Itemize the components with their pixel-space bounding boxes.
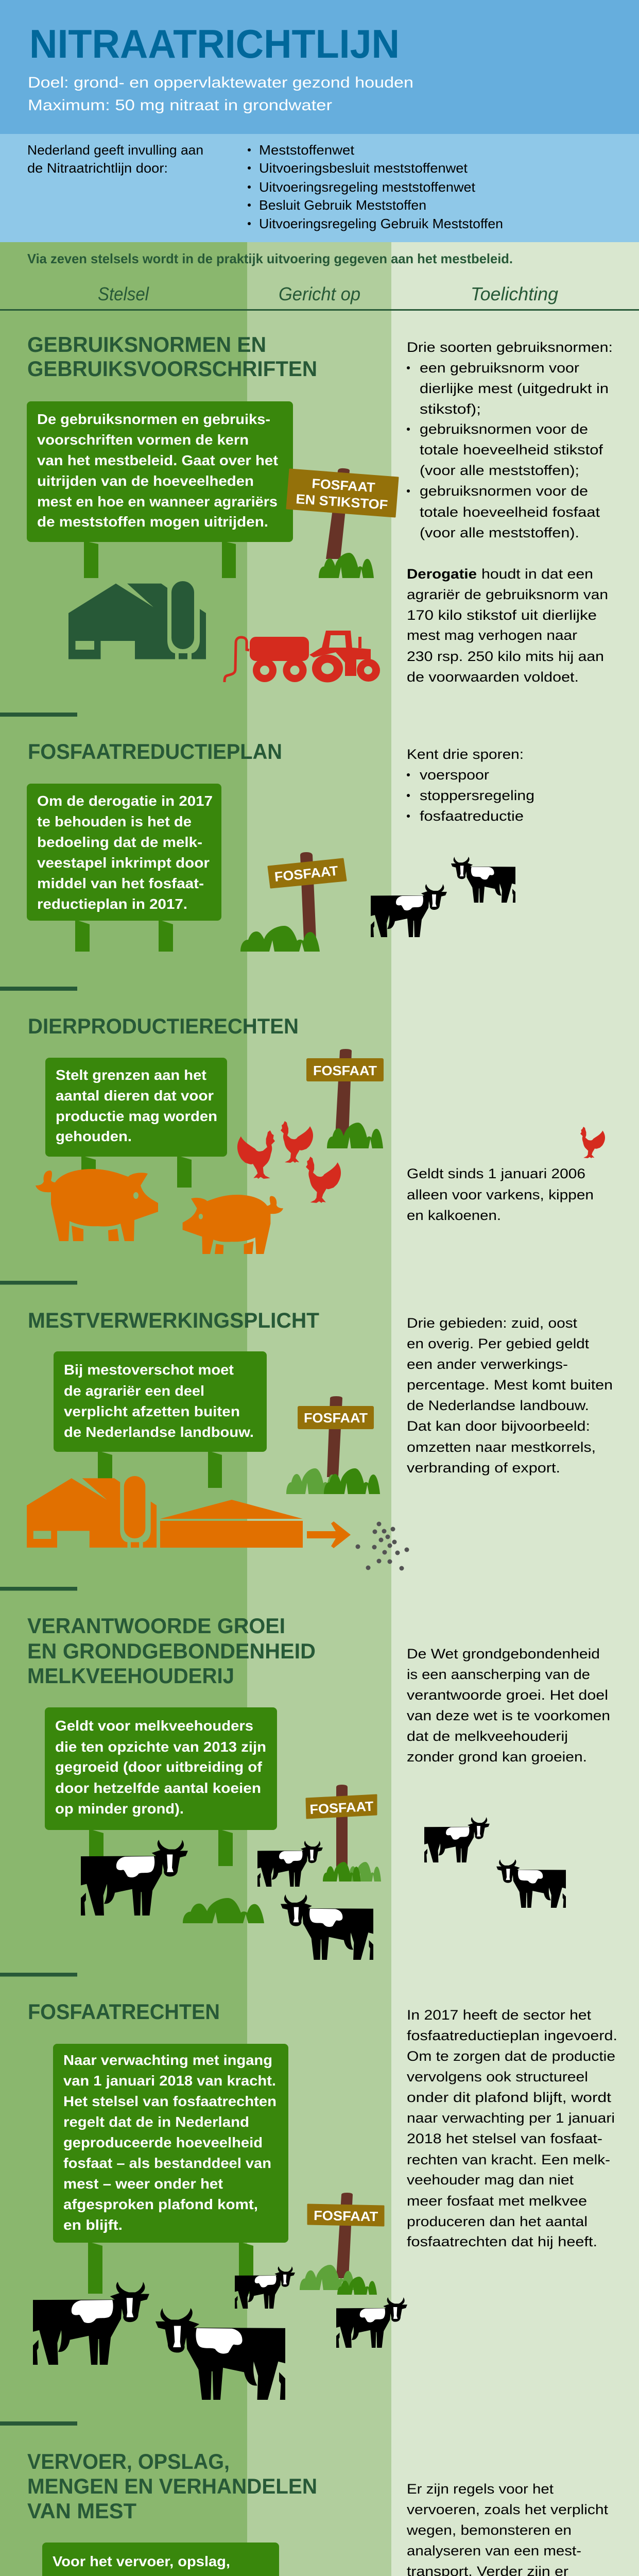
text: toelichting: Drie soorten gebruiksnormen: bbox=[407, 340, 613, 355]
signpost: fosfaat bbox=[286, 1396, 380, 1494]
text: toelichting: en overig. Per gebied geldt bbox=[407, 1336, 590, 1351]
list: wetten en regelingen: Besluit Gebruik Meststoffen bbox=[259, 197, 426, 213]
sign: uitleg: Bij mestoverschot moet bbox=[64, 1362, 234, 1378]
panel: fosfaatreductieplan bbox=[27, 739, 534, 952]
text: toelichting: (voor alle meststoffen); bbox=[420, 463, 579, 478]
sign: uitleg: Stelt grenzen aan het bbox=[56, 1067, 206, 1083]
text: toelichting bbox=[407, 2007, 617, 2249]
subtitle: Maximum: 50 mg nitraat in grondwater bbox=[28, 97, 332, 114]
arrow bbox=[307, 1521, 351, 1548]
text: toelichting: totale hoeveelheid fosfaat bbox=[420, 504, 600, 520]
icon: kippen bbox=[237, 1121, 341, 1203]
sign: uitleg: Het stelsel van fosfaatrechten bbox=[63, 2093, 277, 2109]
sign: uitleg: op minder grond). bbox=[55, 1801, 184, 1817]
signpost: fosfaat en stikstof: EN STIKSTOF bbox=[296, 491, 388, 513]
sign: uitleg: afgesproken plafond komt, bbox=[63, 2196, 258, 2212]
sign: uitleg bbox=[27, 784, 221, 952]
sign: uitleg: de Nederlandse landbouw. bbox=[64, 1424, 254, 1440]
list: wetten en regelingen bbox=[248, 142, 503, 231]
sign: uitleg: aantal dieren dat voor bbox=[56, 1088, 214, 1104]
icon: koeien bbox=[371, 857, 515, 937]
sign: uitleg: mest – weer onder het bbox=[63, 2176, 223, 2192]
signpost: fosfaat bbox=[306, 1049, 384, 1148]
text: toelichting: De Wet grondgebondenheid bbox=[407, 1646, 600, 1662]
heading: VERANTWOORDE GROEI bbox=[27, 1614, 285, 1638]
text: toelichting: meer fosfaat met melkvee bbox=[407, 2193, 587, 2209]
text: toelichting: gebruiksnormen voor de bbox=[420, 483, 588, 499]
sign: uitleg bbox=[53, 2044, 288, 2294]
signpost: fosfaat bbox=[300, 2193, 384, 2295]
text: toelichting: percentage. Mest komt buiten bbox=[407, 1377, 613, 1393]
sign: uitleg: productie mag worden bbox=[56, 1108, 217, 1124]
sign: uitleg: De gebruiksnormen en gebruiks- bbox=[37, 411, 270, 427]
text: toelichting: Drie gebieden: zuid, oost bbox=[407, 1315, 578, 1331]
sign: uitleg: geproduceerde hoeveelheid bbox=[63, 2134, 263, 2150]
panel: verantwoorde groei en grondgebondenheid bbox=[27, 1614, 610, 1960]
sign: uitleg: middel van het fosfaat- bbox=[37, 875, 204, 891]
text: toelichting bbox=[407, 1315, 613, 1476]
text: toelichting: fosfaatreductie bbox=[420, 808, 524, 824]
heading: GEBRUIKSNORMEN EN bbox=[27, 332, 266, 357]
text: toelichting: fosfaatreductieplan ingevoerd. bbox=[407, 2028, 617, 2043]
sign: uitleg: en blijft. bbox=[63, 2217, 123, 2233]
signpost: fosfaat: FOSFAAT bbox=[304, 1410, 368, 1426]
text: toelichting: rechten van kracht. Een melk- bbox=[407, 2152, 610, 2167]
sign: uitleg: Om de derogatie in 2017 bbox=[37, 793, 213, 809]
sign: uitleg: veestapel inkrimpt door bbox=[37, 855, 210, 871]
column background: gericht op bbox=[247, 242, 391, 2576]
sign: uitleg: van 1 januari 2018 van kracht. bbox=[63, 2073, 276, 2089]
panel: vervoer, opslag, mengen en verhandelen bbox=[27, 2449, 611, 2576]
heading: GEBRUIKSVOORSCHRIFTEN bbox=[27, 357, 317, 381]
heading: MESTVERWERKINGSPLICHT bbox=[28, 1308, 319, 1332]
text: toelichting: en kalkoenen. bbox=[407, 1208, 501, 1223]
heading: MELKVEEHOUDERIJ bbox=[27, 1664, 234, 1688]
sign: uitleg: gegroeid (door uitbreiding of bbox=[55, 1759, 263, 1775]
text: toelichting: voerspoor bbox=[420, 767, 489, 783]
sign: uitleg: door hetzelfde aantal koeien bbox=[55, 1780, 261, 1796]
column background: stelsel bbox=[0, 242, 247, 2576]
panel: mestverwerkingsplicht bbox=[27, 1308, 613, 1570]
text: toelichting: dierlijke mest (uitgedrukt in bbox=[420, 381, 609, 396]
sign: uitleg bbox=[42, 2543, 279, 2576]
text: toelichting: Derogatie bbox=[407, 566, 477, 582]
text: toelichting: veehouder mag dan niet bbox=[407, 2172, 574, 2188]
text: toelichting: (voor alle meststoffen). bbox=[420, 525, 579, 540]
heading: FOSFAATREDUCTIEPLAN bbox=[28, 739, 282, 764]
heading: VAN MEST bbox=[27, 2499, 136, 2523]
text: invulling: de Nitraatrichtlijn door: bbox=[27, 160, 168, 176]
intro sentence: Via zeven stelsels wordt in de praktijk uitvoering gegeven aan het mestbeleid. bbox=[27, 251, 513, 266]
text: toelichting: vervoeren, zoals het verplicht bbox=[407, 2502, 609, 2517]
icon: koeien bbox=[81, 1817, 566, 1960]
subtitle: Doel: grond- en oppervlaktewater gezond houden bbox=[28, 74, 413, 91]
text: invulling: Nederland geeft invulling aan bbox=[27, 142, 203, 158]
column headings bbox=[98, 283, 558, 304]
panel: fosfaatrechten bbox=[28, 1999, 617, 2400]
text: toelichting bbox=[406, 2481, 611, 2576]
text: invulling bbox=[27, 142, 203, 176]
sign: uitleg: mest en hoe en wanneer agrariërs bbox=[37, 494, 278, 510]
text: toelichting: een ander verwerkings- bbox=[407, 1357, 568, 1372]
sign: uitleg bbox=[27, 401, 293, 578]
text: toelichting: Kent drie sporen: bbox=[407, 747, 524, 762]
icon: bosje bbox=[183, 1898, 264, 1923]
text: toelichting: fosfaatrechten dat hij heeft. bbox=[407, 2234, 597, 2249]
text: toelichting: een gebruiksnorm voor bbox=[420, 360, 579, 376]
list: wetten en regelingen: Meststoffenwet bbox=[259, 142, 355, 158]
text: toelichting: de Nederlandse landbouw. bbox=[407, 1398, 589, 1413]
signpost: fosfaat: FOSFAAT bbox=[274, 863, 339, 885]
text: toelichting: verantwoorde groei. Het doel bbox=[407, 1687, 608, 1703]
heading bbox=[27, 332, 317, 381]
text: toelichting: onder dit plafond blijft, wordt bbox=[407, 2090, 612, 2105]
list: wetten en regelingen: Uitvoeringsregeling meststoffenwet bbox=[259, 179, 476, 195]
signpost: fosfaat en stikstof: FOSFAAT bbox=[312, 476, 375, 495]
sign: uitleg bbox=[54, 1351, 267, 1488]
icon: boerderij bbox=[68, 581, 206, 659]
column headings: Gericht op bbox=[279, 283, 360, 304]
sign: uitleg: te behouden is het de bbox=[37, 814, 192, 829]
sign: uitleg: reductieplan in 2017. bbox=[37, 896, 187, 912]
sign: uitleg: regelt dat de in Nederland bbox=[63, 2114, 249, 2130]
sign: uitleg: gehouden. bbox=[56, 1128, 132, 1144]
sign: uitleg: Naar verwachting met ingang bbox=[63, 2052, 272, 2068]
sign: uitleg bbox=[45, 1707, 277, 1866]
panel: gebruiksnormen en gebruiksvoorschriften bbox=[27, 332, 613, 685]
sign: uitleg: die ten opzichte van 2013 zijn bbox=[55, 1739, 266, 1755]
text: toelichting: van deze wet is te voorkomen bbox=[407, 1708, 610, 1723]
text: toelichting: 2018 het stelsel van fosfaat- bbox=[407, 2131, 602, 2146]
sign: uitleg: de meststoffen mogen uitrijden. bbox=[37, 514, 268, 530]
panel: invulling bbox=[0, 134, 639, 242]
sign: uitleg: uitrijden van de hoeveelheden bbox=[37, 473, 254, 489]
sign: uitleg: fosfaat – als bestanddeel van bbox=[63, 2155, 271, 2171]
title: NITRAATRICHTLIJN bbox=[29, 21, 400, 66]
signpost: fosfaat bbox=[240, 852, 346, 952]
text: toelichting: zonder grond kan groeien. bbox=[407, 1749, 587, 1765]
text: toelichting: omzetten naar mestkorrels, bbox=[407, 1439, 596, 1455]
icon: tractor met mesttank bbox=[224, 631, 380, 682]
list: wetten en regelingen: Uitvoeringsregeling Gebruik Meststoffen bbox=[259, 216, 503, 231]
text: toelichting: 230 rsp. 250 kilo mits hij aan bbox=[407, 649, 604, 664]
text: toelichting bbox=[407, 1646, 610, 1765]
column background: toelichting bbox=[391, 242, 639, 2576]
icon: mestverwerkingsinstallatie bbox=[27, 1476, 303, 1548]
text: toelichting: dat de melkveehouderij bbox=[407, 1728, 568, 1744]
heading: VERVOER, OPSLAG, bbox=[27, 2449, 230, 2473]
text: toelichting: Geldt sinds 1 januari 2006 bbox=[407, 1166, 585, 1181]
list: wetten en regelingen: Uitvoeringsbesluit meststoffenwet bbox=[259, 160, 468, 176]
panel: header bbox=[0, 0, 639, 134]
heading: EN GRONDGEBONDENHEID bbox=[27, 1639, 316, 1663]
sign: uitleg: Voor het vervoer, opslag, bbox=[53, 2553, 230, 2569]
text: toelichting: houdt in dat een bbox=[481, 566, 593, 582]
column headings: Toelichting bbox=[471, 283, 558, 304]
text: toelichting: verbranding of export. bbox=[407, 1460, 560, 1476]
signpost: fosfaat bbox=[306, 1785, 381, 1882]
text: toelichting: analyseren van een mest- bbox=[407, 2543, 581, 2558]
subtitle bbox=[28, 74, 413, 114]
sign: uitleg: verplicht afzetten buiten bbox=[64, 1403, 240, 1419]
sign: uitleg bbox=[45, 1058, 227, 1188]
signpost: fosfaat en stikstof bbox=[287, 468, 398, 578]
text: toelichting: is een aanscherping van de bbox=[407, 1667, 590, 1682]
sign: uitleg: bedoeling dat de melk- bbox=[37, 834, 202, 850]
icon: mestkorrels bbox=[355, 1522, 409, 1570]
text: toelichting: wegen, bemonsteren en bbox=[406, 2522, 572, 2538]
heading bbox=[27, 2449, 317, 2523]
text: toelichting: naar verwachting per 1 januari bbox=[407, 2110, 615, 2126]
text: toelichting: 170 kilo stikstof uit dierlijke bbox=[407, 607, 597, 623]
text: toelichting: totale hoeveelheid stikstof bbox=[420, 442, 603, 457]
heading: FOSFAATRECHTEN bbox=[28, 1999, 220, 2024]
text: toelichting: produceren dan het aantal bbox=[407, 2214, 588, 2229]
panel: dierproductierechten bbox=[28, 1014, 605, 1254]
text: toelichting: gebruiksnormen voor de bbox=[420, 421, 588, 437]
sign: uitleg: Geldt voor melkveehouders bbox=[55, 1718, 253, 1734]
text: toelichting: Er zijn regels voor het bbox=[407, 2481, 554, 2497]
text: toelichting: mest mag verhogen naar bbox=[407, 628, 577, 643]
text: toelichting bbox=[407, 340, 613, 685]
text: toelichting bbox=[407, 1166, 594, 1223]
text: toelichting: de voorwaarden voldoet. bbox=[407, 669, 579, 685]
sign: uitleg: van het mestbeleid. Gaat over het bbox=[37, 452, 278, 468]
signpost: fosfaat: FOSFAAT bbox=[314, 2208, 378, 2224]
text: toelichting: alleen voor varkens, kippen bbox=[407, 1187, 594, 1202]
signpost: fosfaat: FOSFAAT bbox=[309, 1799, 374, 1817]
text: toelichting: In 2017 heeft de sector het bbox=[407, 2007, 592, 2023]
icon: kip toelichting bbox=[580, 1127, 605, 1158]
icon: koeien bbox=[33, 2266, 407, 2400]
signpost: fosfaat: FOSFAAT bbox=[313, 1063, 377, 1078]
heading: MENGEN EN VERHANDELEN bbox=[27, 2474, 317, 2498]
column headings: Stelsel bbox=[98, 283, 149, 304]
sign: uitleg: de agrariër een deel bbox=[64, 1383, 204, 1399]
text: toelichting: Om te zorgen dat de productie bbox=[407, 2048, 615, 2064]
text: toelichting: Dat kan door bijvoorbeeld: bbox=[407, 1418, 590, 1434]
icon: varkens bbox=[36, 1169, 283, 1254]
text: toelichting: stikstof); bbox=[420, 401, 481, 417]
heading: DIERPRODUCTIERECHTEN bbox=[28, 1014, 299, 1038]
text: toelichting: agrariër de gebruiksnorm van bbox=[407, 587, 608, 602]
text: toelichting: stoppersregeling bbox=[420, 788, 534, 803]
heading bbox=[27, 1614, 316, 1688]
sign: uitleg: voorschriften vormen de kern bbox=[37, 432, 249, 448]
text: toelichting bbox=[407, 747, 534, 824]
text: toelichting: vervolgens ook structureel bbox=[407, 2069, 588, 2084]
